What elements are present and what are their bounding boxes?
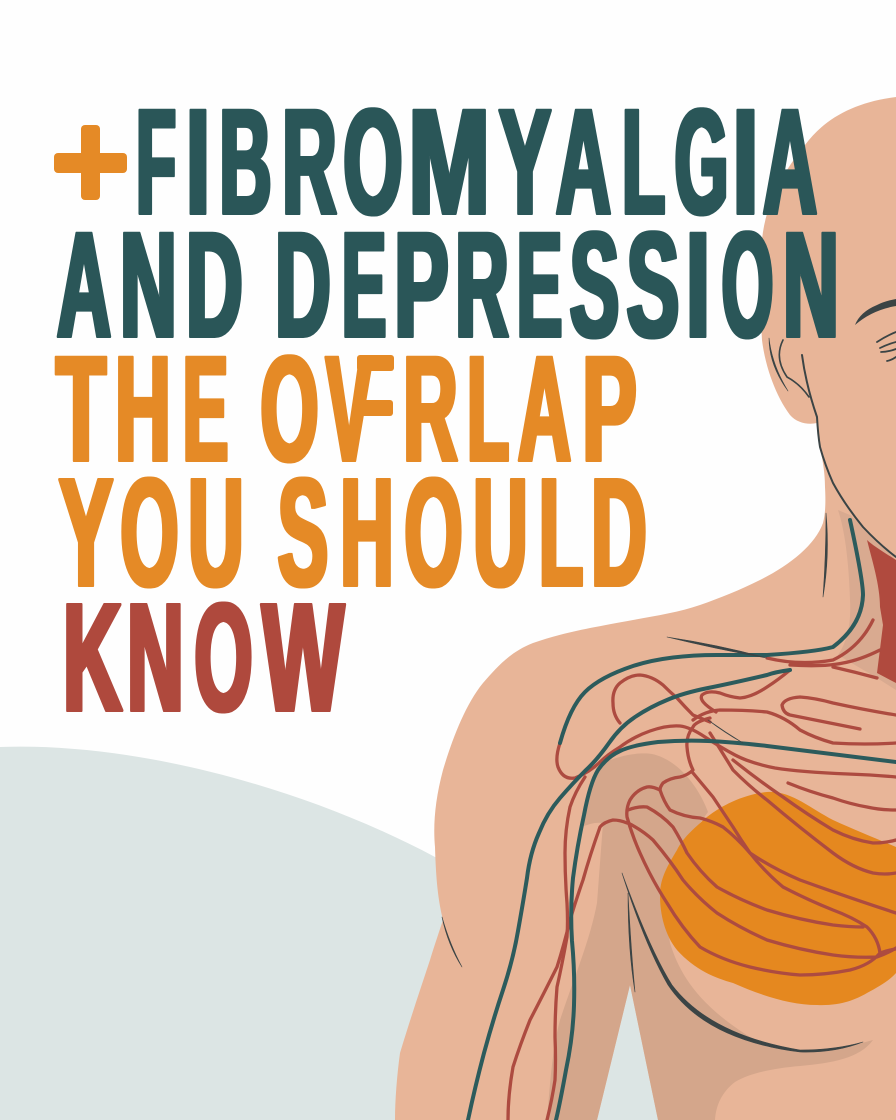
title line: Fibromyalgia: B (220, 78, 272, 246)
title line: Fibromyalgia: O (343, 78, 402, 246)
title line: know: W (262, 572, 344, 744)
body silhouette (395, 97, 896, 1120)
title line: the ovrlap: A (518, 324, 571, 492)
title line: and depression: I (686, 200, 710, 368)
title line: know: N (127, 572, 184, 744)
title line: and depression: A (57, 200, 111, 368)
title line: and depression: P (394, 200, 449, 368)
title line: you should: U (188, 446, 244, 618)
title: D (591, 446, 647, 618)
illustration: human body with nerves (395, 97, 896, 1120)
title line: the ovrlap: P (582, 324, 637, 492)
title line: Fibromyalgia: G (675, 78, 728, 246)
title line: and depression: D (275, 200, 331, 368)
title line: and depression: R (455, 200, 509, 368)
title line: Fibromyalgia: R (282, 78, 337, 246)
title line: Fibromyalgia: I (733, 78, 758, 246)
title line: Fibromyalgia: F (136, 78, 176, 246)
title line: and depression: O (722, 200, 773, 368)
title line: Fibromyalgia: I (186, 78, 210, 246)
title line: you should: U (473, 446, 528, 618)
title line: know: K (63, 572, 122, 744)
title line: and depression: S (570, 200, 619, 368)
pale blue background hill (0, 747, 700, 1120)
title (56, 78, 839, 744)
title line: Fibromyalgia: A (556, 78, 611, 246)
title line: the ovrlap: E (183, 324, 228, 492)
merged E bars on the V of ovrlap (357, 355, 394, 416)
title: A (763, 78, 817, 246)
title line: and depression: S (627, 200, 679, 368)
title line: and depression: D (186, 200, 243, 368)
arm and torso shading (547, 753, 873, 1120)
face: eyebrow and eye (855, 299, 896, 361)
title line: and depression: N (120, 200, 177, 368)
red nerve network (508, 620, 896, 1120)
title line: you should: O (404, 446, 462, 618)
teal nerve lines (468, 520, 896, 1120)
icon: orange plus sign (54, 125, 127, 200)
title line: and depression: N (783, 200, 839, 368)
title line: you should: Y (59, 446, 113, 618)
orange pain area on the chest (660, 792, 896, 1005)
neck shading (838, 510, 896, 690)
title line: the ovrlap: H (115, 324, 171, 492)
title line: Fibromyalgia: L (622, 78, 665, 246)
title line: the ovrlap: V (326, 324, 372, 492)
title line: you should: L (539, 446, 583, 618)
title line: you should: H (340, 446, 394, 618)
title line: know: O (194, 572, 252, 744)
title line: the ovrlap: R (403, 324, 458, 492)
title line: you should: S (278, 446, 328, 618)
neck artery mass (867, 540, 896, 683)
dark contour lines (442, 338, 896, 1052)
title line: you should: O (120, 446, 178, 618)
title line: Fibromyalgia: Y (499, 78, 551, 246)
title line: and depression: E (517, 200, 562, 368)
title line: the ovrlap: L (467, 324, 509, 492)
title line: the ovrlap: O (260, 324, 318, 492)
title line: and depression: E (342, 200, 386, 368)
title line: the ovrlap: T (56, 324, 106, 492)
title line: Fibromyalgia: M (408, 78, 490, 246)
